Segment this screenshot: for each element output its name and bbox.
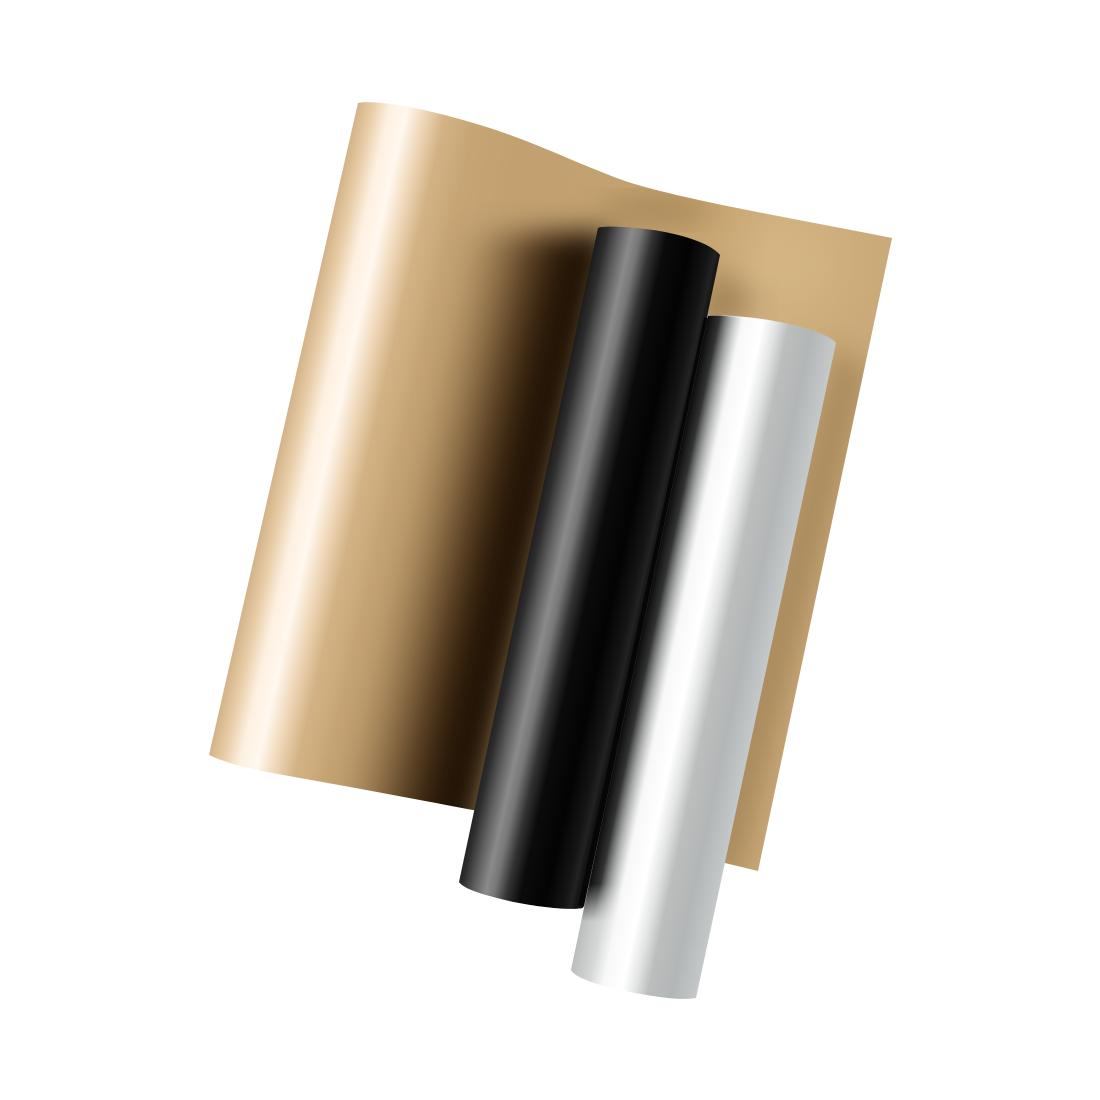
- shadow along top wave: [600, 196, 710, 224]
- dark gap between rolls: [581, 318, 707, 906]
- reflection of black roll on silver: [582, 316, 740, 920]
- gold sheet: [209, 102, 892, 880]
- shadow on the sheet beside black roll: [340, 210, 624, 810]
- shadow beside silver roll: [725, 346, 866, 869]
- illustration: gold sheet with black and silver rolls: [209, 102, 892, 999]
- silver roll: [571, 315, 836, 999]
- black roll: [459, 227, 720, 909]
- lit patch on the sheet: [735, 225, 845, 305]
- shadow beneath black roll cap: [707, 264, 760, 318]
